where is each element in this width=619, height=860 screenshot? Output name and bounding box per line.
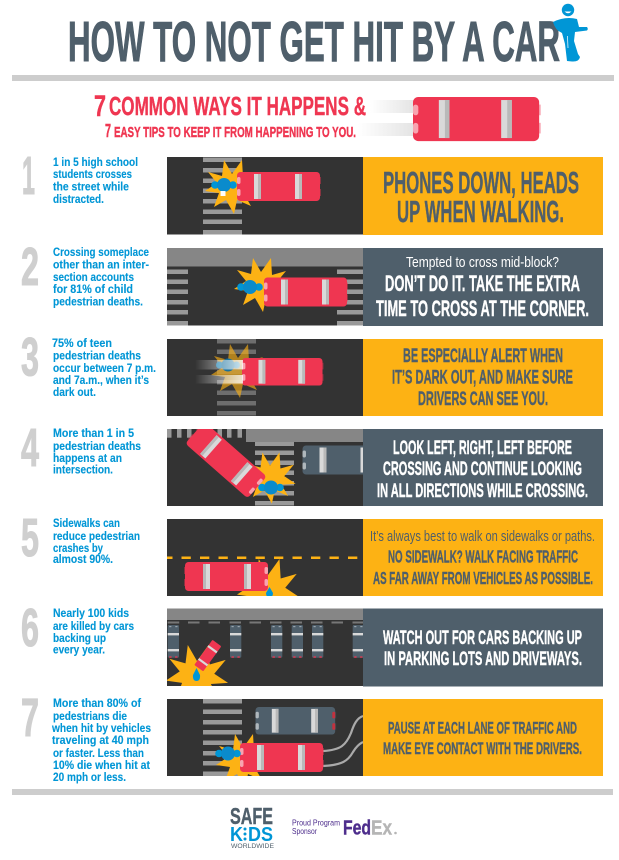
tip 3 bbox=[363, 339, 603, 416]
statistic 1: 1 in 5 high school bbox=[53, 155, 138, 169]
row 1 bbox=[22, 146, 603, 235]
scene 6: parking lot bbox=[167, 608, 363, 686]
logo: Safe Kids Worldwide bbox=[230, 803, 275, 850]
row 6 bbox=[21, 598, 603, 707]
top divider bbox=[12, 75, 614, 81]
statistic 6: backing up bbox=[53, 631, 106, 645]
logo: Safe Kids Worldwide: SAFE bbox=[230, 803, 273, 829]
scene 5: road without sidewalk bbox=[167, 519, 363, 596]
statistic 2: pedestrian deaths. bbox=[53, 294, 143, 308]
logo: FedEx: Ex bbox=[371, 818, 392, 840]
sponsor label bbox=[292, 818, 340, 836]
logo: FedEx: Fed bbox=[343, 818, 371, 840]
number 2: 2 bbox=[21, 237, 39, 297]
statistic 2: other than an inter- bbox=[53, 258, 149, 272]
tip 6 bbox=[363, 608, 603, 686]
statistic 5 bbox=[53, 516, 140, 566]
statistic 6: are killed by cars bbox=[53, 619, 134, 633]
number 5: 5 bbox=[21, 508, 39, 568]
icon: speeding red car bbox=[358, 97, 541, 141]
statistic 7: 10% die when hit at bbox=[53, 758, 150, 772]
statistic 7: when hit by vehicles bbox=[51, 721, 151, 735]
row 5 bbox=[21, 508, 603, 621]
logo: FedEx bbox=[343, 818, 397, 840]
scene 3: dark street bbox=[167, 339, 363, 416]
tip 7 bbox=[363, 699, 603, 776]
row 2 bbox=[21, 237, 603, 326]
tip 4 bbox=[363, 429, 603, 506]
bottom divider bbox=[12, 789, 613, 795]
statistic 1: distracted. bbox=[53, 192, 104, 206]
statistic 7: traveling at 40 mph bbox=[52, 733, 149, 747]
statistic 4: happens at an bbox=[53, 451, 122, 465]
statistic 3: and 7a.m., when it’s bbox=[53, 373, 149, 387]
number 4: 4 bbox=[21, 418, 39, 478]
icon: blue person leaning on title bbox=[553, 4, 588, 62]
statistic 5: almost 90%. bbox=[53, 552, 113, 566]
number 3: 3 bbox=[21, 328, 39, 388]
tip 2 bbox=[363, 248, 603, 326]
statistic 7: More than 80% of bbox=[53, 696, 141, 710]
statistic 3: 75% of teen bbox=[52, 336, 112, 350]
statistic 2: for 81% of child bbox=[53, 282, 133, 296]
statistic 1 bbox=[53, 155, 138, 206]
statistic 7: 20 mph or less. bbox=[53, 770, 126, 784]
subtitle: 7 bbox=[94, 90, 106, 123]
statistic 2: Crossing someplace bbox=[53, 245, 149, 259]
statistic 7: or faster. Less than bbox=[53, 746, 144, 760]
statistic 7 bbox=[51, 696, 151, 784]
number 6: 6 bbox=[21, 598, 39, 658]
row 4 bbox=[21, 418, 603, 506]
statistic 3 bbox=[52, 336, 156, 399]
statistic 3: dark out. bbox=[53, 385, 96, 399]
logo: Safe Kids Worldwide: KIDS bbox=[230, 823, 273, 846]
scene 1: distracted pedestrian on crosswalk bbox=[167, 157, 363, 234]
subtitle: 7 bbox=[105, 121, 111, 141]
statistic 5: Sidewalks can bbox=[53, 516, 120, 530]
tip 2: Tempted to cross mid-block? bbox=[406, 255, 559, 271]
subtitle: COMMON WAYS IT HAPPENS & bbox=[109, 91, 366, 121]
tip 5 bbox=[363, 519, 603, 596]
row 7 bbox=[21, 688, 603, 788]
scene 4: intersection bbox=[167, 429, 363, 506]
statistic 6: every year. bbox=[53, 642, 105, 656]
logo: Safe Kids Worldwide: WORLDWIDE bbox=[231, 843, 275, 850]
scene 7: multi-lane crossing with skid marks bbox=[167, 699, 363, 776]
statistic 2: section accounts bbox=[53, 270, 134, 284]
sponsor label: Proud Program bbox=[292, 818, 340, 828]
statistic 5: reduce pedestrian bbox=[53, 529, 140, 543]
statistic 2 bbox=[53, 245, 149, 308]
scene 2: mid-block crossing bbox=[167, 248, 363, 326]
statistic 6: Nearly 100 kids bbox=[53, 606, 129, 620]
statistic 1: the street while bbox=[53, 180, 129, 194]
tip 1 bbox=[363, 157, 603, 235]
subtitle bbox=[94, 90, 366, 141]
statistic 7: pedestrians die bbox=[53, 709, 127, 723]
statistic 4: intersection. bbox=[53, 462, 113, 476]
statistic 4 bbox=[53, 426, 141, 476]
row 3 bbox=[21, 328, 603, 416]
row 1: 1 bbox=[22, 146, 35, 206]
statistic 3: occur between 7 p.m. bbox=[53, 361, 156, 375]
subtitle: EASY TIPS TO KEEP IT FROM HAPPENING TO YOU. bbox=[114, 125, 356, 141]
statistic 1: students crosses bbox=[53, 167, 132, 181]
statistic 3: pedestrian deaths bbox=[53, 348, 141, 362]
statistic 4: pedestrian deaths bbox=[53, 439, 141, 453]
number 7: 7 bbox=[21, 688, 39, 748]
statistic 6 bbox=[53, 606, 134, 656]
statistic 5: crashes by bbox=[53, 541, 103, 555]
statistic 4: More than 1 in 5 bbox=[53, 426, 134, 440]
sponsor label: Sponsor bbox=[292, 827, 317, 836]
